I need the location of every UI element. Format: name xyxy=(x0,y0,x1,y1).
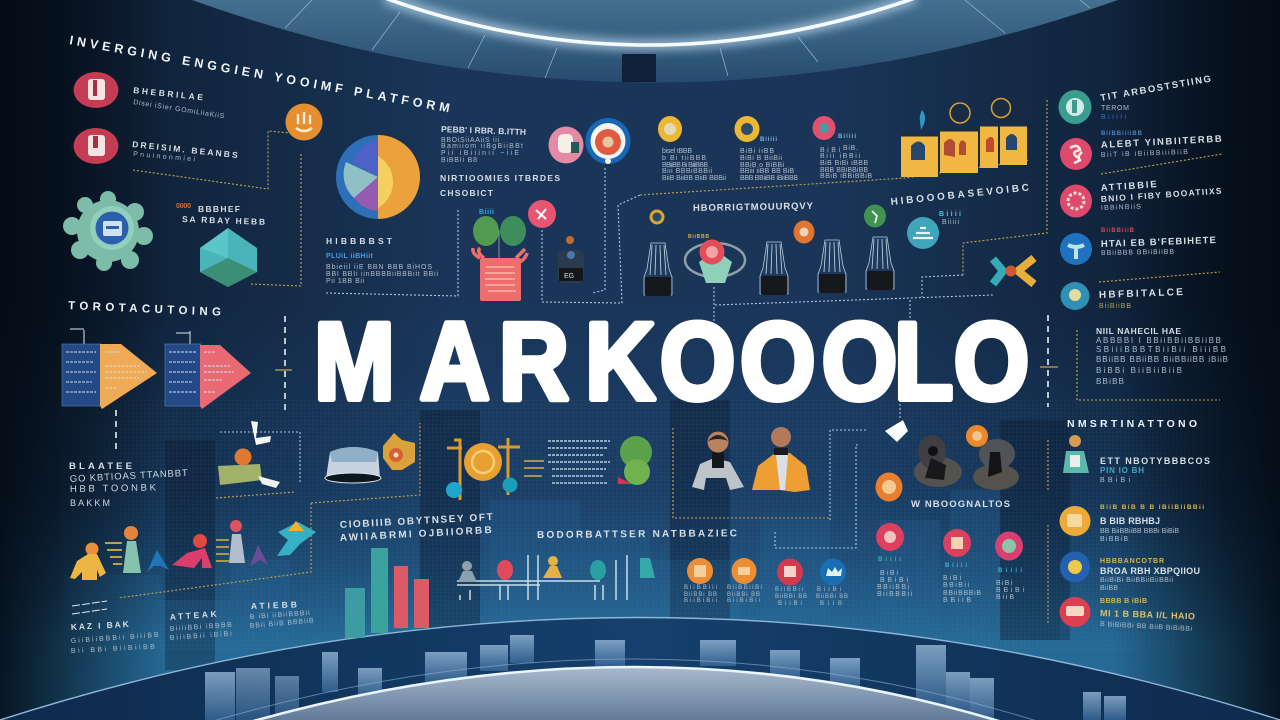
icon: glass bowl xyxy=(325,447,381,483)
badge column 1: BiBi xyxy=(880,570,898,577)
text: column 3: BiBi xyxy=(820,147,840,154)
pie chart xyxy=(336,135,420,219)
badge column 2: BiBi xyxy=(943,575,961,582)
heading: platform: INVERGING ENGGIEN YOOIMF PLATFORM xyxy=(68,33,451,115)
text: paragraph xyxy=(1096,326,1228,386)
text: HIBBBBST block: HIBBBBST xyxy=(326,236,393,246)
text: item 2: BiiB BiB B B iBiiBiiBBii xyxy=(1100,504,1204,511)
badge: orange 2 xyxy=(727,558,762,604)
device: bottle 4 xyxy=(866,237,894,290)
text: column 1: Biii BBBiBBBii xyxy=(662,168,712,175)
figure: red badge xyxy=(497,560,513,580)
text: gear caption: SA RBAY HEBB xyxy=(182,214,265,227)
text: pie notes: BBOiSiiAAiiS iii xyxy=(441,137,499,144)
panel: right list xyxy=(1058,74,1228,386)
badge column 2: BBiiBBBiB xyxy=(943,590,981,597)
panel: lower right list xyxy=(1060,418,1210,633)
text: item 4 xyxy=(1100,598,1195,633)
text: item 2: Pnuinonmiei xyxy=(133,151,196,163)
text: item 2 xyxy=(1100,504,1204,543)
text: pie notes: NIRTIOOMIES ITBRDES xyxy=(440,173,560,183)
icons: orange badges xyxy=(876,425,988,502)
text: column 1: BiiB BiiBB BiiB BBBii xyxy=(662,175,726,182)
text: BLAATEE block xyxy=(69,461,188,508)
icon: green badge xyxy=(864,204,886,228)
badge column 1: BBiiBBi xyxy=(877,584,909,591)
icons: pink and blue badges xyxy=(548,118,630,164)
text: HIBBBBST block xyxy=(326,236,438,285)
text: chart title: CIOBIIIB OBYTNSEY OFT xyxy=(340,512,493,531)
icon: yellow coin 1 xyxy=(658,116,682,142)
text: item 3: HBBBANCOTBR xyxy=(1100,558,1164,565)
text: item 3: IBBiNBiiS xyxy=(1101,204,1141,212)
dotted separators xyxy=(1099,154,1222,282)
text: pie notes: Pii iBiiinii ~iiE xyxy=(441,150,519,157)
yellow cards xyxy=(901,98,1027,177)
icon: x mark xyxy=(993,258,1034,284)
badge: red: BiiBi xyxy=(778,601,802,607)
badge: blue: BiiBi xyxy=(817,587,841,593)
icon: gold accent xyxy=(288,521,304,531)
connector lines xyxy=(116,100,1220,625)
text: HIBBBBST block: Bbieiil iiE BBN BBB BiHOS xyxy=(326,264,432,271)
icon: yellow coin 2 xyxy=(734,116,760,142)
presenters xyxy=(692,427,810,492)
note 3: ATIEBB xyxy=(251,599,297,611)
note 2: BiiiBBii iBiBi xyxy=(170,631,232,642)
text: item 1: Biiiii xyxy=(1101,114,1126,121)
icon: red badge xyxy=(1060,138,1092,170)
text: small labels: BiiBBB xyxy=(688,234,709,240)
icon: blue badge xyxy=(1060,233,1092,265)
text: column 2: BBiB o BiBBi xyxy=(740,162,784,169)
icon: gold badge xyxy=(383,433,415,470)
icons: plant, note and bottle: EG xyxy=(564,273,574,280)
text: paragraph: BBiBB xyxy=(1096,377,1124,386)
text: item 2: ALEBT YINBIITERBB xyxy=(1101,134,1222,151)
person: grey suit xyxy=(692,432,744,490)
text: paragraph: SBiiiBBBTBiiBii BiiiBB xyxy=(1096,345,1226,354)
icon: teal badge xyxy=(1058,90,1092,124)
text: data lines xyxy=(548,441,610,483)
badge: red: BiiBBii xyxy=(775,587,803,593)
text: column 2: BBB BBiiBB iBiiBBB xyxy=(740,175,798,182)
ceiling square xyxy=(622,54,656,82)
panel: bottom badges xyxy=(684,558,848,607)
text: column 3: BBB BBiBBiBB xyxy=(820,167,868,174)
icon: red badge xyxy=(1060,184,1092,218)
icons: plant, note and bottle xyxy=(473,200,584,301)
note 3: BBii BiiB BBBiiB xyxy=(250,617,314,630)
icon: teal hexagon xyxy=(200,228,257,287)
text: BLAATEE block: HBB TOONBK xyxy=(70,482,157,495)
text: chart title xyxy=(340,512,493,544)
main title: MARKOOOLO xyxy=(314,299,1029,422)
device: bottle 2 xyxy=(760,242,788,295)
icon: red badge 1 xyxy=(74,72,118,108)
bar chart xyxy=(345,548,429,638)
badge column 2: BBiBii xyxy=(943,582,969,589)
icon: origami bird xyxy=(277,522,316,556)
badge: red xyxy=(775,558,807,607)
text: small labels: Biiiii xyxy=(942,219,959,226)
text: item 5 xyxy=(1099,287,1183,310)
panel: process arrows xyxy=(62,329,251,409)
icons: plant, note and bottle: Biiii xyxy=(479,209,494,216)
badge column 3: BiBi xyxy=(996,580,1012,587)
badge column 1 xyxy=(876,523,912,598)
text: item 2: BiiT iB iBiiBBiiiBiiB xyxy=(1101,149,1188,159)
icon: red circle xyxy=(1060,597,1090,627)
text: item 1: BHEBRILAE xyxy=(133,85,204,102)
text: item 4 xyxy=(1101,228,1216,257)
text: item 1: TIT ARBOSTSTIING xyxy=(1100,74,1212,104)
person: pink and grey xyxy=(216,520,245,563)
text: item 1: TEROM xyxy=(1101,105,1129,112)
text: paragraph: BBiiBB BBiiBB BiiBBiiBB iBiiB xyxy=(1096,355,1228,364)
device row xyxy=(644,204,961,296)
letter mark: purple xyxy=(250,545,268,566)
text: column 3: Biii iBBii xyxy=(820,153,860,160)
icon: green spheres xyxy=(618,436,652,485)
card: arrow one xyxy=(62,344,157,409)
note 2: BiiiiBBi iBBBB xyxy=(170,622,232,633)
badge column 1: BiiBBBii xyxy=(877,591,912,598)
text: pie notes: Bamiiom iiBgBiiBBt xyxy=(441,143,523,150)
text: column 2: BiBi B BiiBii xyxy=(740,155,782,162)
badge: blue: BiiB xyxy=(820,601,842,607)
icon: red badge 2 xyxy=(74,128,118,164)
heading: top left section: TOROTACUTOING xyxy=(68,300,221,319)
icon: orange badge xyxy=(794,220,814,244)
text: column 1: bisel tBBB xyxy=(662,148,692,155)
badge column 3: BBiBi xyxy=(996,587,1024,594)
headings: centre right xyxy=(693,183,1030,214)
badge column 1: Biiii xyxy=(878,557,901,563)
badge column 2 xyxy=(943,529,981,604)
text: pie notes xyxy=(440,124,560,198)
panel: people chart xyxy=(70,520,316,580)
text: item 4: BiiBBiiiB xyxy=(1101,228,1135,234)
panel: lower centre figures xyxy=(457,555,655,600)
note 3: B iBi iiBiiBBBii xyxy=(250,610,310,621)
person: orange jacket xyxy=(752,427,810,492)
floor band with skyline xyxy=(0,618,1280,720)
text: item 3: BROA RBH XBPQIIOU xyxy=(1100,566,1200,576)
text: item 4: B BiBiBBi BB BiiB BiBiBBi xyxy=(1100,621,1193,633)
letter mark: blue xyxy=(147,550,169,572)
text: HIBBBBST block: PLUiL iiBHiit xyxy=(326,253,374,260)
text: item 3 xyxy=(1100,179,1222,212)
note 1 xyxy=(71,619,159,655)
ceiling xyxy=(192,0,1118,82)
text: column 1 xyxy=(662,148,726,182)
text: item 1: Disei iSier GOmiLiiaKiiS xyxy=(133,99,225,120)
icons: black earbuds xyxy=(914,435,1019,490)
text: item 3: ATTIBBIE xyxy=(1100,179,1157,194)
panel: lower middle badges xyxy=(876,523,1024,604)
badge: orange 2: BiiBBiiBi xyxy=(727,585,762,591)
text: item 1 xyxy=(133,85,225,120)
panel: top-left list xyxy=(63,72,322,287)
text: item 2: BiBBiB xyxy=(1100,536,1128,543)
text: HIBBBBST block: Pii 1BB Bii xyxy=(326,278,364,285)
figure: gold person xyxy=(543,556,562,578)
badge: orange 2: BiiBBi BB xyxy=(727,592,760,598)
icon: teal-blue badge xyxy=(1060,282,1090,310)
text: pie notes: PEBB' I RBR. B.ITTH xyxy=(441,124,526,137)
text: item 1: ETT NBOTYBBBCOS xyxy=(1100,456,1210,466)
icon: box with flag xyxy=(218,421,280,488)
text: paragraph: NIIL NAHECIL HAE xyxy=(1096,326,1181,336)
badge: red: BiiBBi BB xyxy=(775,594,807,600)
heading: lower right: W NBOOGNALTOS xyxy=(911,499,1010,510)
text: column 3 xyxy=(820,134,872,180)
device: bottle 3 xyxy=(818,240,846,293)
badge column 3: BiiB xyxy=(996,594,1014,601)
icon: blue circle xyxy=(1060,552,1090,582)
text: BLAATEE block: BLAATEE xyxy=(69,461,132,472)
text: gear caption: 0000 xyxy=(176,203,191,210)
note 1: GiiBiiBBBii BiiiBB xyxy=(71,632,159,645)
icon: coin and posts xyxy=(446,438,544,500)
text: item 2 xyxy=(1101,131,1222,159)
badge: orange 2: BiiBiBii xyxy=(727,598,760,604)
text: small labels xyxy=(688,211,961,240)
badge: orange 1 xyxy=(684,558,717,604)
text: column 3: Biiiii xyxy=(838,134,856,140)
text: small labels: Biiii xyxy=(939,211,961,218)
text: item 2: BB BiiBBiiBB BBBi BiBiB xyxy=(1100,528,1179,535)
text: item 5: BiiBiiBB xyxy=(1099,303,1131,310)
badge: orange 1: BiiBBi BB xyxy=(684,592,717,598)
badge: blue: BiiBBi BB xyxy=(816,594,848,600)
text: column 3: BiB. xyxy=(843,145,858,152)
device: ring and badge xyxy=(685,240,745,283)
text: item 2: DREISIM. BEANBS xyxy=(132,139,239,160)
icon: teal badge xyxy=(907,217,939,249)
icon: teal gear xyxy=(63,191,153,271)
text: item 4: BBiiBBB BBiiBiiBB xyxy=(1101,249,1174,257)
panel: top centre items xyxy=(658,116,872,182)
badge column 3 xyxy=(995,532,1024,601)
headings: centre right: HBORRIGTMOUURQVY xyxy=(693,201,814,214)
person: teal and orange xyxy=(105,526,141,573)
person: red xyxy=(172,534,212,568)
text: column 2: Biiiii xyxy=(760,137,777,143)
badge column 2: BBiiB xyxy=(943,597,971,604)
text: BLAATEE block: BAKKM xyxy=(70,498,110,508)
icon: gold coin xyxy=(650,210,664,224)
badge: orange 1: BiiBiBii xyxy=(684,598,717,604)
text: item 4: MI 1 B BBA I/L HAIO xyxy=(1100,608,1195,621)
icon: pink coin xyxy=(812,116,836,140)
text: item 4: HTAI EB B'FEBIHETE xyxy=(1101,235,1216,250)
text: item 1 xyxy=(1100,456,1210,484)
person: yellow xyxy=(70,542,106,580)
badge column 2: Biiii xyxy=(945,563,967,569)
badge: orange 1: BiiBBiii xyxy=(684,585,717,591)
text: pie notes: CHSOBICT xyxy=(440,188,494,198)
text: item 1: PIN IO BH xyxy=(1100,466,1144,475)
text: item 3: BiiBiBi BiiBBiiBiiBBii xyxy=(1100,577,1173,584)
card: arrow two xyxy=(165,344,251,409)
text: lower left notes xyxy=(71,599,314,655)
text: item 1: BBiBi xyxy=(1100,477,1130,484)
text: column 2: BBiii iiBB BB BiB xyxy=(740,168,794,175)
icon: figure xyxy=(1063,435,1089,473)
figure: grey person xyxy=(458,561,477,582)
text: item 5: HBFBITALCE xyxy=(1099,287,1183,301)
text: gear caption xyxy=(176,203,265,227)
heading: NMSRTINATTONO xyxy=(1067,418,1197,430)
text: column 3: BiB BiBi iBBB xyxy=(820,160,868,167)
text: HIBBBBST block: BBI BBIi iinBBBBiiBBBiit BBii xyxy=(326,271,438,278)
heading: lower centre: BODORBATTSER NATBBAZIEC xyxy=(537,528,737,541)
text: item 3: BNIO I FIBY BOOATIIXS xyxy=(1100,186,1222,204)
text: item 3 xyxy=(1100,558,1200,592)
note 2 xyxy=(169,609,232,642)
icon: orange circle xyxy=(1060,506,1090,536)
badge column 1: BBiBi xyxy=(880,577,908,584)
badge column 3: Biiii xyxy=(998,568,1022,574)
text: column 2: BiBi iiBB xyxy=(740,148,774,155)
text: column 3: BBiB iBBiBBiB xyxy=(820,173,872,180)
text: gear caption: BBBHEF xyxy=(198,204,240,214)
text: item 1 xyxy=(1100,74,1212,121)
text: column 2 xyxy=(740,137,798,182)
note 1: KAZ I BAK xyxy=(71,619,130,632)
figure: teal badge xyxy=(590,560,606,580)
icon: white diamond xyxy=(885,420,908,442)
text: BLAATEE block: GO KBTIOAS TTANBBT xyxy=(70,468,188,485)
ceiling light strip xyxy=(385,0,915,45)
text: item 3: BiiBB xyxy=(1100,585,1118,592)
badge: blue xyxy=(816,558,848,607)
text: paragraph: BiBBi BiiBiiBiiB xyxy=(1096,366,1182,375)
note 1: Bii BBi BiiBiiBB xyxy=(71,644,155,655)
headings: centre right: HIBOOOBASEVOIBC xyxy=(890,183,1030,208)
text: column 1: b Bi tiiBBB xyxy=(662,155,706,162)
text: item 2: B BIB RBHBJ xyxy=(1100,516,1160,526)
note 3 xyxy=(250,599,314,630)
text: item 2: BiiBBiiiiBB xyxy=(1101,131,1143,137)
text: item 4: BBBB B iBiB xyxy=(1100,598,1147,605)
note 2: ATTEAK xyxy=(169,609,218,622)
device: bottle 1 xyxy=(644,243,672,296)
text: pie notes: BiBBIi B8 xyxy=(441,157,477,164)
figure: teal mark xyxy=(640,558,655,578)
icon: orange badge xyxy=(286,104,322,140)
text: column 1: BBiiBB Bi BiiiBBB xyxy=(662,162,708,169)
text: paragraph: ABBBBI I BBiiBBiiBBiiBB xyxy=(1096,336,1221,345)
text: chart title: AWIIABRMI OJBIIORBB xyxy=(340,525,492,544)
floor stage xyxy=(210,659,1040,720)
